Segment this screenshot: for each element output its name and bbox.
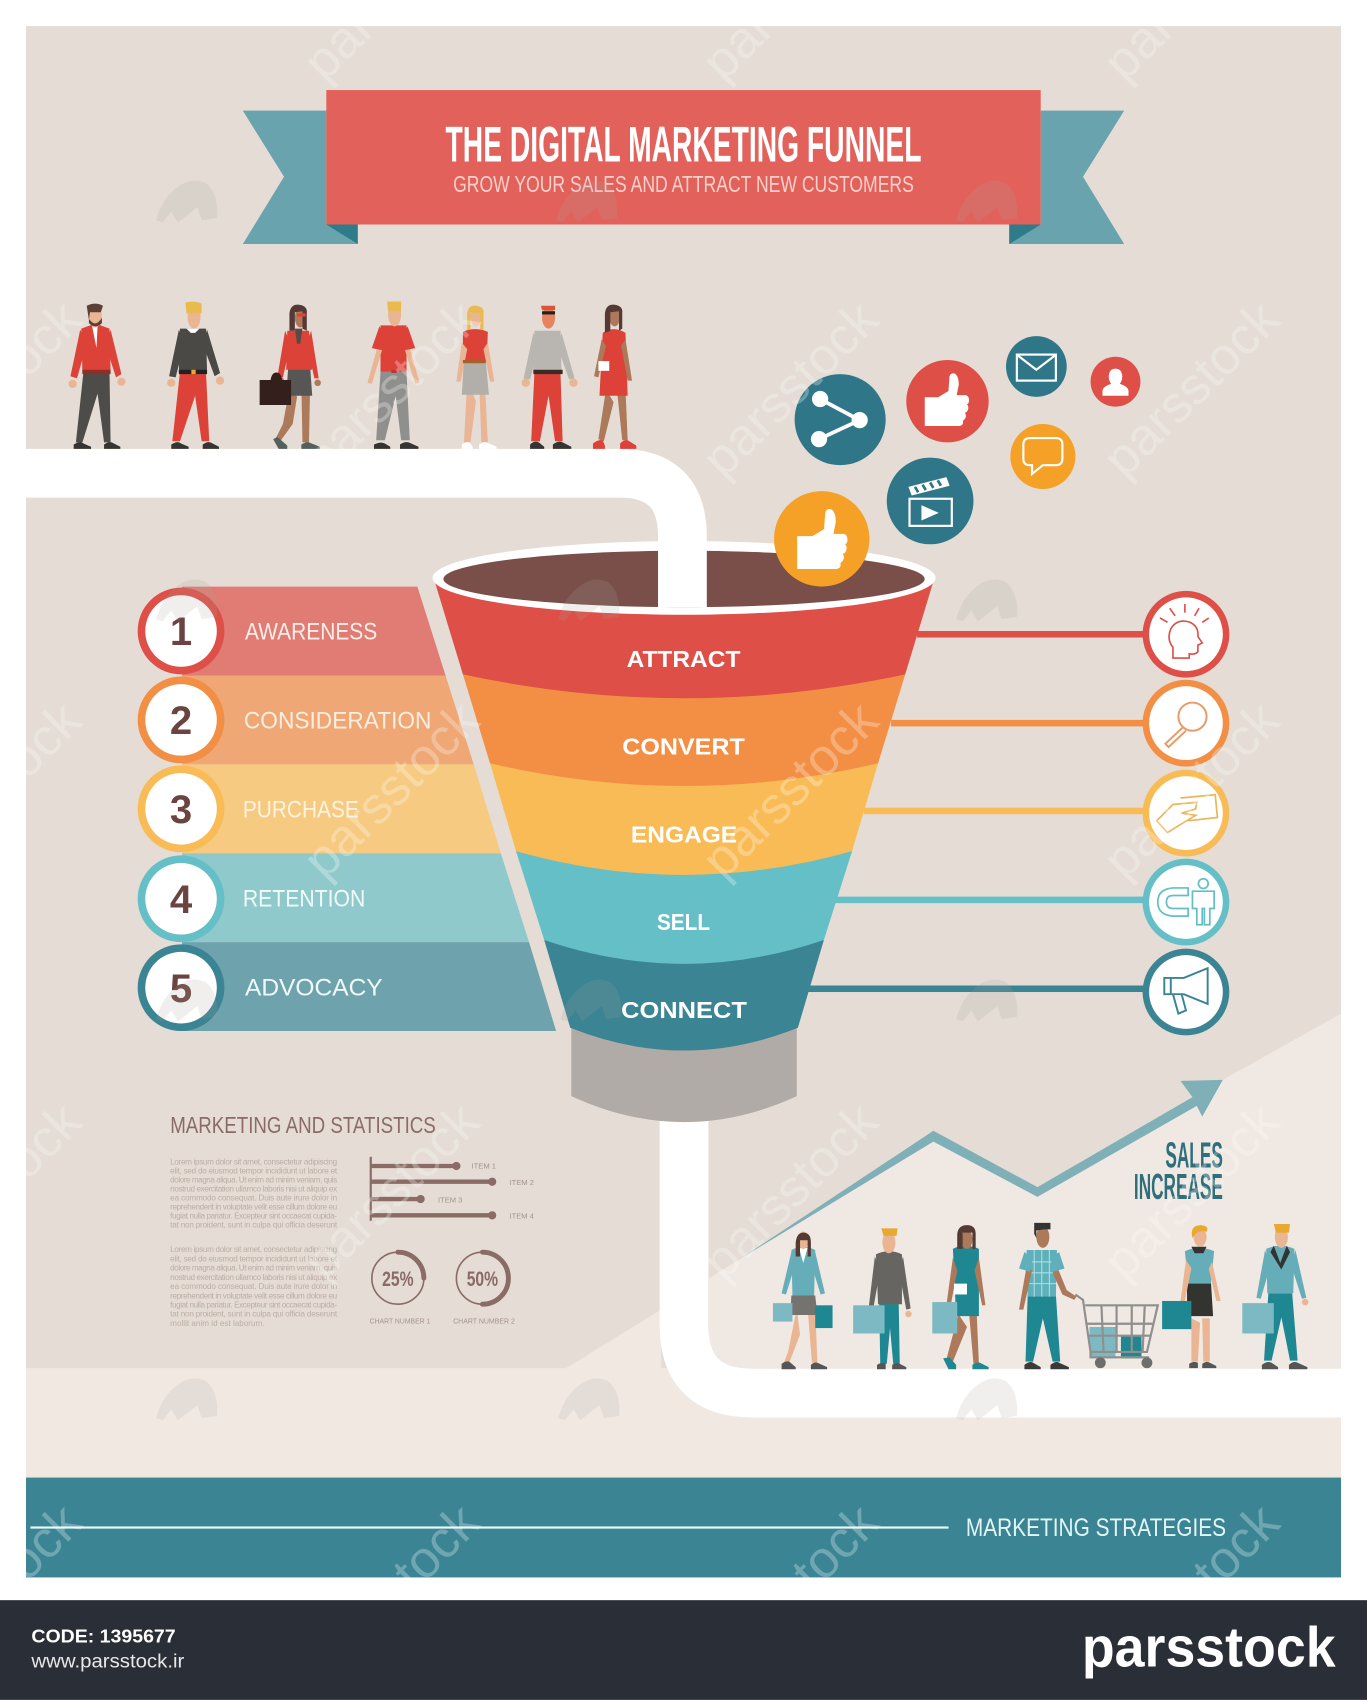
source bar background	[0, 1600, 1367, 1700]
watermark text: parsstock	[1092, 690, 1291, 889]
watermark text: parsstock	[691, 1091, 890, 1291]
text block 2: fugiat nulla pariatur. Excepteur sint occaecat cupida-	[170, 1300, 337, 1309]
bar chart: ITEM 2	[510, 1178, 534, 1187]
icon: idea head	[1160, 604, 1209, 658]
step 5 advocacy: ADVOCACY	[245, 974, 383, 1001]
icon: video clapper	[887, 458, 973, 544]
step 5 advocacy	[138, 942, 556, 1031]
panel: funnel stage connectors	[807, 591, 1229, 1035]
watermark text: parsstock	[1092, 289, 1291, 488]
text block 2: mollit anim id est laborum.	[170, 1319, 265, 1328]
text block 1: tat non proident, sunt in culpa qui officia deserunt	[170, 1220, 338, 1229]
strip line	[30, 1526, 949, 1529]
text block 2	[170, 1245, 338, 1328]
step 1 awareness	[138, 587, 446, 675]
person: blonde woman	[456, 306, 496, 449]
donut chart 25%	[370, 1252, 430, 1326]
panel: marketing and statistics	[170, 1112, 534, 1328]
subtitle: GROW YOUR SALES AND ATTRACT NEW CUSTOMERS	[453, 171, 914, 197]
label: sales increase	[1134, 1136, 1223, 1207]
step 3 purchase: PURCHASE	[243, 796, 359, 823]
watermark text: parsstock	[691, 289, 890, 488]
brand logo: parsstock	[1082, 1615, 1336, 1678]
person: man in teal jacket	[1242, 1224, 1308, 1369]
footer strip	[26, 1478, 1341, 1577]
website: www.parsstock.ir	[30, 1650, 185, 1672]
person: woman in teal dress	[932, 1225, 989, 1369]
white pipe top	[0, 473, 682, 564]
text block 2: dolore magna aliqua. Ut enim ad minim veniam, quis	[170, 1264, 337, 1273]
bar chart	[370, 1157, 534, 1221]
funnel layer: attract	[434, 578, 934, 698]
step 2 consideration: 2	[170, 699, 192, 743]
text block 1: nostrud exercitation ullamco laboris nisi ut aliquip ex	[170, 1184, 337, 1193]
label: convert: CONVERT	[622, 734, 745, 760]
sales increase section: INCREASE	[1134, 1167, 1223, 1207]
step 1 awareness: 1	[170, 610, 192, 654]
label: sell: SELL	[657, 909, 710, 935]
funnel	[433, 541, 936, 1122]
briefcase	[260, 373, 291, 404]
icon: thumbs up orange	[774, 491, 869, 587]
icon: profile	[1091, 357, 1140, 407]
icon: megaphone	[1164, 968, 1208, 1014]
text block 2: reprehenderit in voluptate velit esse cillum dolore eu	[170, 1291, 337, 1300]
funnel opening	[443, 551, 925, 607]
text block 1: Lorem ipsum dolor sit amet, consectetur adipiscing	[170, 1157, 337, 1166]
icon: magnifier	[1165, 703, 1207, 747]
icon: hand with card	[1157, 795, 1217, 833]
text block 1: dolore magna aliqua. Ut enim ad minim veniam, quis	[170, 1175, 337, 1184]
text block 2: nostrud exercitation ullamco laboris nisi ut aliquip ex	[170, 1273, 337, 1282]
person: man in dark sweater	[167, 302, 224, 449]
banner body	[326, 90, 1041, 224]
label: attract: ATTRACT	[627, 646, 741, 672]
funnel rim	[433, 541, 936, 615]
donut chart 25%: 25%	[382, 1266, 414, 1291]
connector: sell	[835, 859, 1229, 945]
text block 2: tat non proident, sunt in culpa qui officia deserunt	[170, 1310, 338, 1319]
pipe entering funnel	[658, 542, 707, 607]
donut chart 25%: CHART NUMBER 1	[370, 1317, 430, 1326]
donut chart 50%: CHART NUMBER 2	[453, 1317, 515, 1326]
ribbon left	[243, 111, 358, 244]
image code: CODE: 1395677	[31, 1625, 176, 1646]
watermark logos	[156, 181, 1017, 1420]
connector: attract	[917, 591, 1229, 678]
donut chart 50%: 50%	[467, 1266, 498, 1291]
panel: customer journey steps	[138, 587, 556, 1031]
step 1 awareness: AWARENESS	[245, 619, 377, 646]
donut chart 50%	[453, 1252, 515, 1326]
sales increase section	[740, 1080, 1308, 1369]
step 4 retention	[138, 853, 529, 942]
watermark text: parsstock	[1092, 1493, 1291, 1692]
text block 2: elit, sed do eiusmod tempor incididunt ut labore et	[170, 1254, 338, 1263]
step 5 advocacy: 5	[170, 967, 192, 1011]
connector: convert	[891, 680, 1229, 767]
watermark text: parsstock	[691, 690, 890, 889]
source bar	[0, 1600, 1367, 1700]
lighter sales area	[709, 1014, 1341, 1377]
text block 1: fugiat nulla pariatur. Excepteur sint occaecat cupida-	[170, 1211, 337, 1220]
bar chart: ITEM 4	[510, 1212, 534, 1221]
text block 1	[170, 1157, 338, 1229]
strip label: MARKETING STRATEGIES	[966, 1514, 1226, 1542]
white pipe bottom	[684, 1106, 1367, 1393]
sales increase section: SALES	[1165, 1136, 1223, 1176]
text block 1: reprehenderit in voluptate velit esse cillum dolore eu	[170, 1202, 337, 1211]
title: THE DIGITAL MARKETING FUNNEL	[446, 117, 921, 173]
person: man pushing a cart	[1019, 1223, 1076, 1369]
connector: connect	[807, 949, 1229, 1035]
person: man in red t-shirt	[367, 301, 420, 449]
step 3 purchase: 3	[170, 788, 192, 832]
text block 1: ea commodo consequat. Duis aute irure dolor in	[170, 1193, 337, 1202]
bar chart: ITEM 3	[438, 1195, 462, 1204]
bar chart: ITEM 1	[472, 1162, 496, 1171]
watermark text: parsstock	[292, 1091, 491, 1291]
strip background	[26, 1478, 1341, 1577]
icon: share	[795, 374, 886, 465]
heading: MARKETING AND STATISTICS	[170, 1112, 436, 1138]
person: woman with bags	[773, 1232, 833, 1369]
label: engage: ENGAGE	[631, 821, 737, 847]
step 3 purchase	[138, 764, 501, 853]
icon: mail	[1006, 336, 1067, 397]
person: woman in skirt	[1162, 1225, 1221, 1368]
icon: speech bubble	[1010, 424, 1075, 489]
funnel layer: convert	[463, 674, 905, 786]
text block 2: ea commodo consequat. Duis aute irure dolor in	[170, 1282, 337, 1291]
text block 1: elit, sed do eiusmod tempor incididunt ut labore et	[170, 1166, 338, 1175]
person: man with bag	[853, 1228, 912, 1369]
shopping cart	[1075, 1294, 1158, 1368]
people entering the funnel	[69, 301, 636, 449]
ribbon folds	[326, 224, 1041, 244]
person: woman in red dress	[593, 305, 636, 449]
label: connect: CONNECT	[621, 997, 747, 1023]
watermark text: parsstock	[292, 690, 491, 889]
step 4 retention: 4	[170, 878, 193, 922]
step 2 consideration	[138, 675, 474, 764]
watermark text: parsstock	[1092, 1091, 1291, 1291]
watermark text: parsstock	[292, 1493, 491, 1692]
step 4 retention: RETENTION	[243, 885, 365, 912]
icon: thumbs up red	[906, 360, 989, 442]
text block 2: Lorem ipsum dolor sit amet, consectetur adipiscing	[170, 1245, 337, 1254]
ribbon right	[1009, 111, 1124, 244]
lighter floor band	[26, 1310, 1341, 1477]
step 2 consideration: CONSIDERATION	[244, 708, 431, 735]
connector: engage	[864, 770, 1229, 857]
funnel spout	[571, 1025, 797, 1122]
person: man with sunglasses	[522, 306, 578, 449]
funnel layer: engage	[490, 763, 878, 875]
funnel layer: sell	[516, 851, 852, 964]
person: man in red jacket	[69, 304, 126, 449]
person: woman with briefcase	[260, 305, 321, 449]
title banner	[243, 90, 1124, 244]
icon: magnet and person	[1158, 879, 1214, 925]
floating social icons	[774, 336, 1140, 587]
funnel layer: connect	[544, 940, 824, 1051]
arrow: sales trend	[740, 1080, 1223, 1259]
watermark text: parsstock	[292, 289, 491, 488]
watermark text: parsstock	[691, 1493, 890, 1692]
